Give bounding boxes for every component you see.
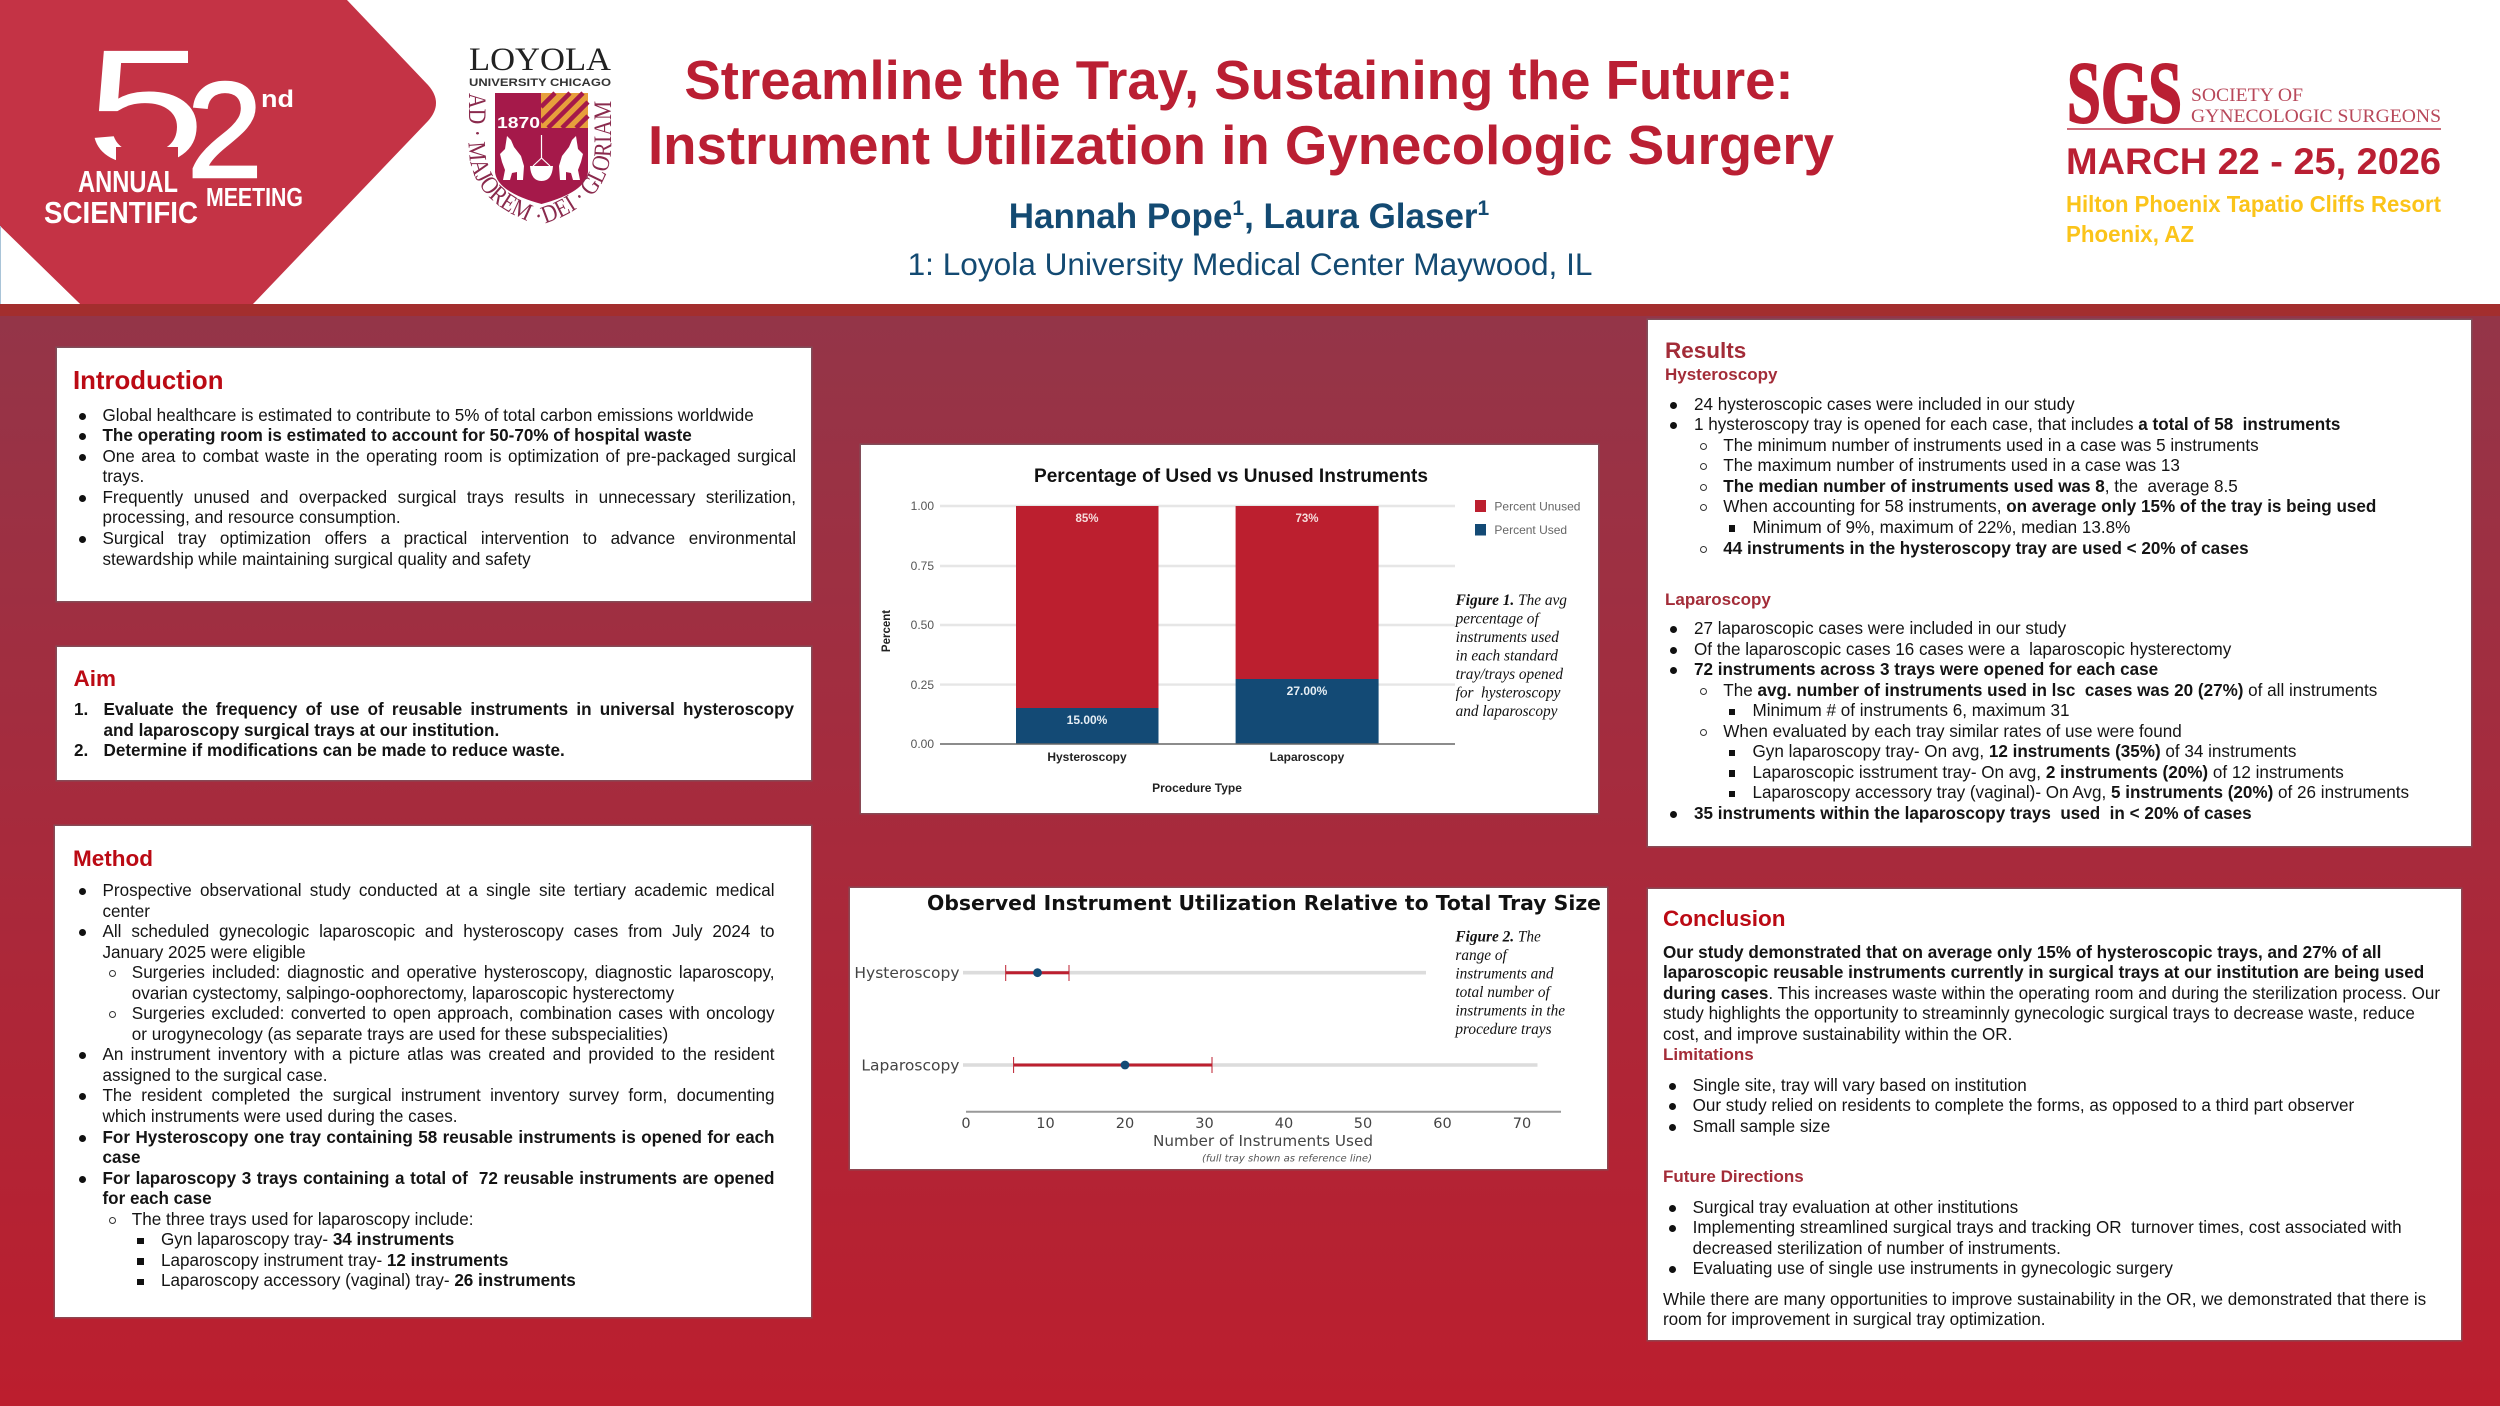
- future directions list: decreased sterilization of number of instruments.: [1693, 1239, 2061, 1258]
- aim list: [74, 700, 794, 760]
- method bullets: Surgeries excluded: converted to open approach, combination cases with oncology or urogynecology (as separate trays are used for these subspecialities): [132, 1004, 774, 1044]
- hysteroscopy findings: 1 hysteroscopy tray is opened for each case, that includes a total of 58 instruments: [1694, 415, 2340, 434]
- laparoscopy findings: Gyn laparoscopy tray- On avg, 12 instruments (35%) of 34 instruments: [1752, 742, 2296, 761]
- laparoscopy findings: The avg. number of instruments used in lsc cases was 20 (27%) of all instruments: [1723, 681, 2377, 700]
- method bullets: [79, 881, 774, 1290]
- limitations list: [1669, 1076, 2354, 1136]
- method bullets: All scheduled gynecologic laparoscopic and hysteroscopy cases from July 2024 to January 2025 were eligible: [102, 922, 774, 962]
- x axis: 60: [1433, 1116, 1452, 1132]
- bars: hysteroscopy: [1016, 506, 1158, 744]
- figure 2 caption: [1454, 928, 1565, 1038]
- panel: aim: 1.: [74, 700, 88, 719]
- future directions list: Surgical tray evaluation at other institutions: [1693, 1198, 2018, 1217]
- meeting logo: 52nd Annual Scientific Meeting: 5: [86, 16, 206, 198]
- subheading: future directions: Future Directions: [1663, 1167, 1804, 1186]
- Loyola University Chicago logo: 1870: [497, 115, 540, 132]
- figure 1 caption: and laparoscopy: [1456, 703, 1558, 720]
- aim list: Evaluate the frequency of use of reusable instruments in universal hysteroscopy: [104, 700, 794, 719]
- limitations list: Small sample size: [1693, 1117, 1830, 1136]
- method bullets: Gyn laparoscopy tray- 34 instruments: [161, 1230, 454, 1249]
- Loyola University Chicago logo: LOYOLA: [469, 42, 611, 78]
- laparoscopy findings: When evaluated by each tray similar rates of use were found: [1723, 722, 2182, 741]
- heading: conclusion: Conclusion: [1663, 906, 1786, 931]
- closing statement: [1663, 1290, 2426, 1329]
- heading: introduction: Introduction: [73, 366, 223, 394]
- Loyola University Chicago logo: [468, 42, 612, 224]
- laparoscopy findings: Laparoscopy accessory tray (vaginal)- On Avg, 5 instruments (20%) of 26 instruments: [1752, 783, 2409, 802]
- figure 1 caption: in each standard: [1456, 648, 1558, 664]
- method bullets: Laparoscopy instrument tray- 12 instruments: [161, 1251, 508, 1270]
- legend: Percent Unused: [1494, 500, 1580, 514]
- conclusion paragraph: Our study demonstrated that on average only 15% of hysteroscopic trays, and 27% of all: [1663, 943, 2381, 962]
- closing statement: While there are many opportunities to improve sustainability in the OR, we demonstrated that there is: [1663, 1290, 2426, 1309]
- panel: aim: 2.: [74, 741, 88, 760]
- hysteroscopy findings: When accounting for 58 instruments, on average only 15% of the tray is being used: [1723, 497, 2376, 516]
- subheading: laparoscopy: Laparoscopy: [1665, 590, 1771, 609]
- method bullets: The three trays used for laparoscopy include:: [132, 1210, 474, 1229]
- row: hysteroscopy: Hysteroscopy: [854, 964, 960, 982]
- Loyola University Chicago logo: AD · MAJOREM · DEI · GLORIAM: [468, 93, 612, 224]
- range chart: observed instrument utilization: [854, 891, 1601, 1164]
- bars: laparoscopy: 27.00%: [1287, 684, 1328, 698]
- SGS logo and meeting details: MARCH 22 - 25, 2026: [2066, 141, 2441, 182]
- y axis ticks: 0.00: [911, 737, 934, 751]
- laparoscopy findings: 27 laparoscopic cases were included in our study: [1694, 619, 2066, 638]
- conclusion paragraph: during cases. This increases waste within the operating room and during the sterilization process. Our: [1663, 984, 2440, 1003]
- figure 1 caption: percentage of: [1455, 610, 1541, 628]
- introduction bullets: [79, 406, 796, 569]
- x axis: 20: [1116, 1116, 1134, 1132]
- conclusion paragraph: cost, and improve sustainability within the OR.: [1663, 1025, 2012, 1044]
- y axis ticks: 0.75: [911, 559, 934, 573]
- introduction bullets: One area to combat waste in the operating room is optimization of pre-packaged surgical trays.: [102, 447, 796, 486]
- subheading: hysteroscopy: Hysteroscopy: [1665, 365, 1777, 384]
- panel: figure 1 stacked bar chart: [861, 445, 1598, 813]
- method bullets: The resident completed the surgical instrument inventory survey form, documenting which instruments were used during the cases.: [102, 1086, 774, 1126]
- panel: conclusion: [1648, 889, 2461, 1340]
- laparoscopy findings: Laparoscopic isstrument tray- On avg, 2 instruments (20%) of 12 instruments: [1752, 763, 2344, 782]
- meeting logo: 52nd Annual Scientific Meeting: [0, 0, 436, 304]
- meeting logo: 52nd Annual Scientific Meeting: SCIENTIFIC: [44, 195, 198, 230]
- figure 2 caption: total number of: [1455, 984, 1552, 1001]
- SGS logo and meeting details: Hilton Phoenix Tapatio Cliffs Resort: [2066, 191, 2441, 217]
- y axis ticks: 1.00: [911, 499, 934, 513]
- panel: results: [1648, 320, 2471, 846]
- x axis: 40: [1275, 1116, 1293, 1132]
- x axis: 70: [1513, 1116, 1531, 1132]
- x axis: Number of Instruments Used: [1153, 1132, 1373, 1150]
- hysteroscopy findings: 44 instruments in the hysteroscopy tray are used < 20% of cases: [1723, 539, 2249, 558]
- y axis ticks: [911, 499, 934, 751]
- meeting logo: 52nd Annual Scientific Meeting: nd: [261, 86, 294, 113]
- aim list: and laparoscopy surgical trays at our institution.: [104, 721, 499, 740]
- future directions list: Implementing streamlined surgical trays and tracking OR turnover times, cost associated with: [1693, 1218, 2402, 1237]
- future directions list: Evaluating use of single use instruments in gynecologic surgery: [1693, 1259, 2173, 1278]
- figure 1 caption: for hysteroscopy: [1456, 684, 1561, 702]
- bar chart: percentage of used vs unused instruments: [881, 465, 1580, 795]
- figure 1 caption: instruments used: [1456, 629, 1559, 646]
- panel: method: [55, 826, 811, 1317]
- figure 1 caption: tray/trays opened: [1456, 666, 1563, 683]
- legend: Percent Used: [1494, 523, 1567, 537]
- conclusion paragraph: laparoscopic reusable instruments currently in surgical trays at our institution are being used: [1663, 963, 2424, 982]
- figure 1 caption: [1455, 592, 1567, 720]
- closing statement: room for improvement in surgical tray optimization.: [1663, 1310, 2046, 1329]
- panel: aim: [56, 647, 811, 780]
- authors: 1: [1478, 197, 1490, 220]
- title: [648, 50, 1835, 176]
- x axis categories: Laparoscopy: [1270, 750, 1345, 764]
- meeting logo: 52nd Annual Scientific Meeting: 2: [187, 54, 263, 206]
- panel: figure 2 range chart: [850, 888, 1607, 1169]
- hysteroscopy findings: The median number of instruments used was 8, the average 8.5: [1723, 477, 2238, 496]
- bars: hysteroscopy: 15.00%: [1067, 713, 1108, 727]
- title: Streamline the Tray, Sustaining the Future:: [684, 50, 1794, 111]
- hysteroscopy findings: 24 hysteroscopic cases were included in our study: [1694, 395, 2075, 414]
- row: laparoscopy: Laparoscopy: [861, 1056, 960, 1074]
- SGS logo and meeting details: SOCIETY OF: [2191, 85, 2303, 106]
- figure 2 caption: procedure trays: [1454, 1021, 1552, 1038]
- limitations list: Single site, tray will vary based on institution: [1693, 1076, 2027, 1095]
- row: hysteroscopy: [854, 964, 1426, 982]
- figure 2 caption: instruments in the: [1455, 1002, 1565, 1020]
- laparoscopy findings: 72 instruments across 3 trays were opened for each case: [1694, 660, 2158, 679]
- heading: results: Results: [1665, 338, 1746, 363]
- laparoscopy findings: [1670, 619, 2409, 823]
- introduction bullets: Surgical tray optimization offers a practical intervention to advance environmental stewardship while maintaining surgical quality and safety: [102, 529, 796, 569]
- x axis categories: [1047, 750, 1345, 795]
- row: laparoscopy: [861, 1056, 1538, 1074]
- x axis categories: Procedure Type: [1152, 781, 1242, 795]
- x axis: 50: [1354, 1116, 1372, 1132]
- method bullets: An instrument inventory with a picture atlas was created and provided to the resident assigned to the surgical case.: [102, 1045, 774, 1085]
- SGS logo and meeting details: [2066, 45, 2441, 247]
- SGS logo and meeting details: Phoenix, AZ: [2066, 221, 2194, 247]
- introduction bullets: Frequently unused and overpacked surgical trays results in unnecessary sterilization, processing, and resource consumption.: [102, 488, 796, 527]
- authors: 1: [1232, 197, 1244, 220]
- figure 1 caption: Figure 1. The avg: [1455, 592, 1567, 609]
- y axis title: Percent: [881, 610, 893, 652]
- figure 2 caption: Figure 2. The: [1454, 928, 1541, 946]
- page background: [0, 316, 2500, 1406]
- chart title: Observed Instrument Utilization Relative to Total Tray Size: [927, 891, 1601, 915]
- heading: method: Method: [73, 846, 153, 871]
- x axis: 30: [1195, 1116, 1214, 1132]
- title: Instrument Utilization in Gynecologic Surgery: [648, 115, 1835, 176]
- header artwork: [0, 0, 2441, 304]
- bars: hysteroscopy: 85%: [1075, 513, 1099, 525]
- figure 2 caption: instruments and: [1455, 966, 1554, 982]
- laparoscopy findings: Of the laparoscopic cases 16 cases were a laparoscopic hysterectomy: [1694, 640, 2231, 659]
- introduction bullets: Global healthcare is estimated to contribute to 5% of total carbon emissions worldwide: [102, 406, 754, 425]
- method bullets: Surgeries included: diagnostic and operative hysteroscopy, diagnostic laparoscopy, ovarian cystectomy, salpingo-oophorectomy, laparoscopic hysterectomy: [132, 963, 774, 1003]
- hysteroscopy findings: The maximum number of instruments used in a case was 13: [1723, 456, 2180, 475]
- figure 2 caption: range of: [1455, 947, 1510, 964]
- authors: , Laura Glaser: [1244, 197, 1478, 236]
- heading: aim: Aim: [74, 666, 116, 691]
- method bullets: Laparoscopy accessory (vaginal) tray- 26 instruments: [161, 1271, 576, 1290]
- aim list: Determine if modifications can be made to reduce waste.: [104, 741, 565, 760]
- x axis: (full tray shown as reference line): [1202, 1154, 1372, 1164]
- x axis categories: Hysteroscopy: [1047, 750, 1127, 764]
- bars: laparoscopy: [1236, 506, 1379, 744]
- hysteroscopy findings: Minimum of 9%, maximum of 22%, median 13.8%: [1752, 518, 2130, 537]
- SGS logo and meeting details: SGS: [2067, 45, 2182, 142]
- introduction bullets: The operating room is estimated to account for 50-70% of hospital waste: [102, 426, 692, 445]
- x axis: [961, 1112, 1561, 1164]
- meeting logo: 52nd Annual Scientific Meeting: ANNUAL: [78, 164, 178, 199]
- header band: [0, 304, 2500, 316]
- y axis ticks: 0.25: [911, 678, 934, 692]
- panel: introduction: [56, 348, 811, 601]
- y axis ticks: 0.50: [911, 618, 934, 632]
- bars: laparoscopy: 73%: [1295, 513, 1319, 525]
- Loyola University Chicago logo: UNIVERSITY CHICAGO: [469, 77, 612, 89]
- legend: [1475, 500, 1580, 537]
- conclusion paragraph: study highlights the opportunity to streaminnly gynecologic surgical trays to decrease waste, reduce: [1663, 1004, 2415, 1023]
- conclusion paragraph: [1663, 943, 2440, 1044]
- SGS logo and meeting details: GYNECOLOGIC SURGEONS: [2191, 106, 2441, 127]
- x axis: 0: [961, 1116, 971, 1132]
- affiliation: 1: Loyola University Medical Center Maywood, IL: [908, 246, 1592, 282]
- future directions list: [1669, 1198, 2402, 1278]
- limitations list: Our study relied on residents to complete the forms, as opposed to a third part observer: [1693, 1096, 2354, 1115]
- authors: Hannah Pope: [1009, 197, 1232, 236]
- laparoscopy findings: 35 instruments within the laparoscopy trays used in < 20% of cases: [1694, 804, 2252, 823]
- meeting logo: 52nd Annual Scientific Meeting: MEETING: [206, 182, 303, 212]
- laparoscopy findings: Minimum # of instruments 6, maximum 31: [1752, 701, 2070, 720]
- chart title: Percentage of Used vs Unused Instruments: [1034, 465, 1428, 487]
- method bullets: For Hysteroscopy one tray containing 58 reusable instruments is opened for each case: [102, 1128, 774, 1167]
- method bullets: For laparoscopy 3 trays containing a total of 72 reusable instruments are opened for each case: [102, 1169, 774, 1208]
- x axis: 10: [1036, 1116, 1055, 1132]
- method bullets: Prospective observational study conducted at a single site tertiary academic medical center: [102, 881, 774, 921]
- subheading: limitations: Limitations: [1663, 1045, 1754, 1064]
- hysteroscopy findings: [1670, 395, 2376, 558]
- hysteroscopy findings: The minimum number of instruments used in a case was 5 instruments: [1723, 436, 2259, 455]
